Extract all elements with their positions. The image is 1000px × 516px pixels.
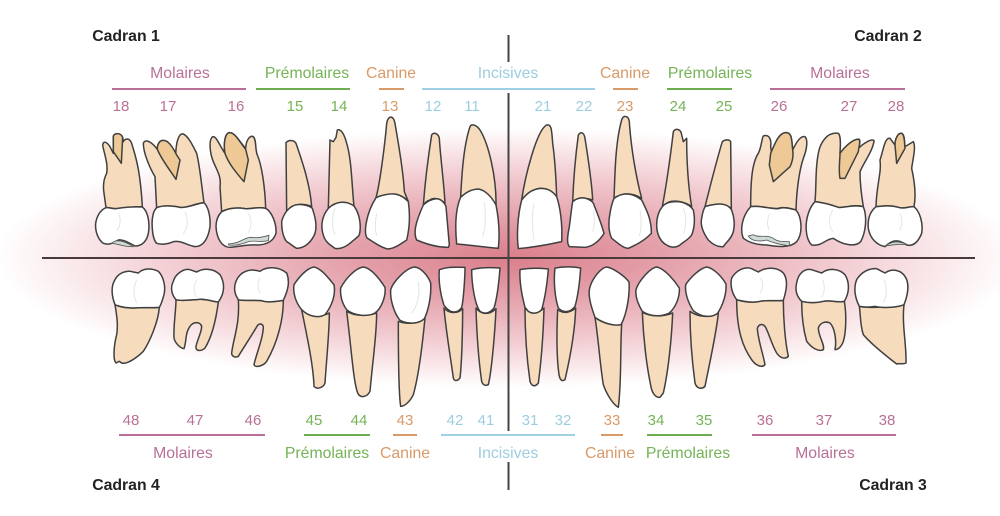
tooth 42 <box>439 267 465 381</box>
upper tooth numbers: 26 <box>771 98 787 115</box>
tooth 33 <box>589 267 629 407</box>
tooth 38 <box>855 269 908 364</box>
upper tooth numbers: 13 <box>382 98 398 115</box>
tooth 24 <box>657 129 694 247</box>
upper tooth-type labels: Canine <box>600 65 650 82</box>
tooth 17 <box>143 134 210 247</box>
background: red glow around the jaw axis <box>0 128 1000 388</box>
tooth 46 <box>232 268 288 366</box>
tooth 41 <box>472 268 500 385</box>
tooth 21 <box>517 125 562 249</box>
upper tooth numbers: 14 <box>331 98 347 115</box>
lower tooth-type labels <box>153 445 855 462</box>
lower tooth numbers: 35 <box>696 412 712 429</box>
tooth 23 <box>609 116 651 248</box>
upper tooth numbers: 18 <box>113 98 129 115</box>
tooth 43 <box>391 267 431 406</box>
lower tooth numbers: 44 <box>351 412 367 429</box>
lower tooth numbers: 34 <box>648 412 664 429</box>
tooth 28 <box>868 133 922 247</box>
lower tooth-type labels: Molaires <box>795 445 855 462</box>
lower tooth numbers: 36 <box>757 412 773 429</box>
upper tooth numbers: 21 <box>535 98 551 115</box>
upper tooth numbers: 12 <box>425 98 441 115</box>
vertical midline axis <box>508 35 510 490</box>
quadrant title: Cadran 1: Cadran 1 <box>92 28 160 45</box>
lower tooth numbers: 42 <box>447 412 463 429</box>
upper tooth-type labels: Molaires <box>810 65 870 82</box>
tooth 34 <box>636 267 679 397</box>
tooth 36 <box>731 268 788 366</box>
upper tooth numbers <box>113 98 904 115</box>
tooth 11 <box>456 125 499 248</box>
quadrant title: Cadran 4: Cadran 4 <box>92 477 160 494</box>
tooth 14 <box>322 130 360 249</box>
tooth 32 <box>554 267 581 381</box>
quadrant title: Cadran 2: Cadran 2 <box>854 28 922 45</box>
lower tooth numbers: 41 <box>478 412 494 429</box>
tooth 35 <box>685 267 726 388</box>
upper tooth-type labels: Molaires <box>150 65 210 82</box>
lower tooth-type labels: Canine <box>585 445 635 462</box>
upper tooth numbers: 15 <box>287 98 303 115</box>
lower tooth-type labels: Prémolaires <box>285 445 369 462</box>
tooth 13 <box>366 117 409 249</box>
upper-right teeth (quadrant 2) <box>517 116 922 249</box>
upper tooth numbers: 27 <box>841 98 857 115</box>
lower tooth numbers: 45 <box>306 412 322 429</box>
lower tooth numbers: 46 <box>245 412 261 429</box>
lower tooth numbers: 48 <box>123 412 139 429</box>
upper tooth-type labels: Prémolaires <box>265 65 349 82</box>
lower-right teeth (quadrant 3) <box>520 267 908 407</box>
lower tooth-type labels: Prémolaires <box>646 445 730 462</box>
upper tooth numbers: 23 <box>617 98 633 115</box>
horizontal jaw axis <box>42 257 975 259</box>
tooth 37 <box>796 269 848 350</box>
lower tooth-type labels: Molaires <box>153 445 213 462</box>
upper tooth numbers: 28 <box>888 98 904 115</box>
tooth 16 <box>210 133 276 247</box>
lower tooth-type labels: Canine <box>380 445 430 462</box>
tooth 27 <box>806 133 874 245</box>
lower tooth numbers: 32 <box>555 412 571 429</box>
upper tooth numbers: 11 <box>464 98 480 115</box>
tooth 18 <box>96 134 149 247</box>
lower tooth numbers: 37 <box>816 412 832 429</box>
lower tooth numbers: 47 <box>187 412 203 429</box>
lower-left teeth (quadrant 4) <box>112 267 500 406</box>
lower tooth numbers: 38 <box>879 412 895 429</box>
upper group underlines <box>112 88 905 90</box>
lower tooth-type labels: Incisives <box>478 445 538 462</box>
lower tooth numbers: 31 <box>522 412 538 429</box>
tooth 44 <box>341 267 385 397</box>
lower tooth numbers: 43 <box>397 412 413 429</box>
tooth 31 <box>520 268 548 386</box>
upper tooth numbers: 22 <box>576 98 592 115</box>
tooth 45 <box>294 267 334 388</box>
tooth 15 <box>282 140 316 248</box>
upper-left teeth (quadrant 1) <box>96 117 499 249</box>
lower tooth numbers <box>123 412 895 429</box>
upper tooth-type labels: Canine <box>366 65 416 82</box>
upper tooth numbers: 16 <box>228 98 244 115</box>
tooth 25 <box>701 140 734 247</box>
tooth 47 <box>172 269 224 350</box>
upper tooth numbers: 17 <box>160 98 176 115</box>
upper tooth numbers: 24 <box>670 98 686 115</box>
upper tooth numbers: 25 <box>716 98 732 115</box>
quadrant title: Cadran 3: Cadran 3 <box>859 477 927 494</box>
tooth 26 <box>742 133 807 246</box>
tooth 22 <box>568 133 604 247</box>
upper tooth-type labels: Incisives <box>478 65 538 82</box>
upper tooth-type labels: Prémolaires <box>668 65 752 82</box>
lower group underlines <box>119 434 896 436</box>
tooth 12 <box>415 133 449 247</box>
lower tooth numbers: 33 <box>604 412 620 429</box>
upper tooth-type labels <box>150 65 870 82</box>
tooth 48 <box>112 269 165 363</box>
